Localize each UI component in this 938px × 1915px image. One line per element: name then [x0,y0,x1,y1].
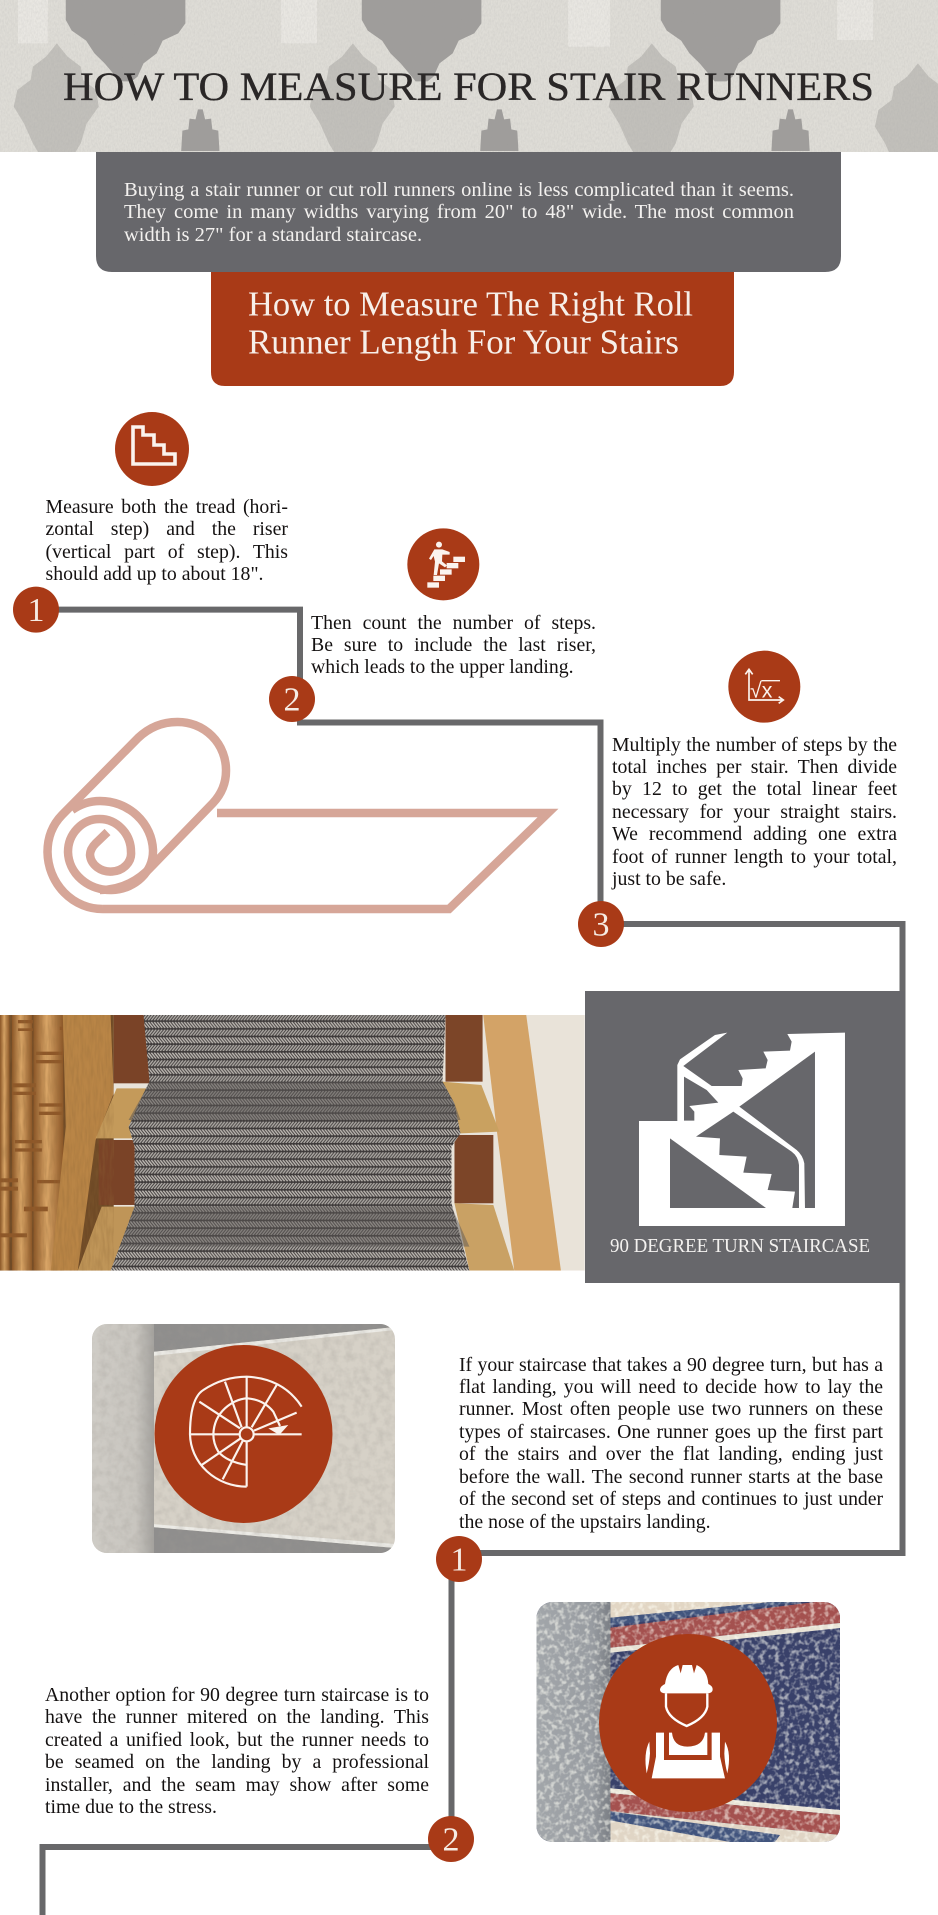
photo: herringbone stair runner [0,1015,585,1271]
option 2 text: have the runner mitered on the landing. This [45,1706,429,1728]
step 3 text [611,734,897,890]
badge: step 1: 1 [28,592,44,629]
option 1 text: before the wall. The second runner starts at the base [459,1466,883,1488]
intro text: width is 27" for a standard staircase. [124,224,422,246]
step 3 text: necessary for your straight stairs. [612,801,897,823]
step 2 text: Be sure to include the last riser, [311,634,596,656]
icon: square root graph: √x [750,678,773,702]
badge: step 2 [269,676,315,722]
step 2 text [311,612,596,678]
header banner [0,0,938,152]
option 1 text: the nose of the upstairs landing. [459,1511,711,1533]
icon: stair outline [115,412,189,486]
panel label: 90 DEGREE TURN STAIRCASE [610,1235,870,1257]
step 3 text: total inches per stair. Then divide [612,756,897,778]
connector lines [36,610,902,1915]
step 3 text: We recommend adding one extra [612,823,897,845]
icon: square root graph [728,651,800,723]
icon: turning staircase [639,1033,845,1226]
step 3 text: Multiply the number of steps by the [612,734,897,756]
step 3 text: just to be safe. [612,868,726,890]
badge: option 1 [436,1536,482,1582]
step 1 text [46,496,288,585]
step 1 text: Measure both the tread (hori- [46,496,288,518]
panel: subheading [211,272,734,386]
panel: intro [96,152,841,272]
badge: option 2: 2 [442,1822,460,1858]
option 2 text [45,1684,429,1818]
icon: installer [645,1665,729,1778]
option 1 text: If your staircase that takes a 90 degree turn, but has a [459,1354,883,1376]
intro text: Buying a stair runner or cut roll runners online is less complicated than it seems. [124,179,794,201]
step 1 text: (vertical part of step). This [46,541,288,563]
intro text [124,179,794,246]
option 2 text: Another option for 90 degree turn staircase is to [45,1684,429,1706]
option 1 text: flat landing, you will need to decide how to lay the [459,1376,883,1398]
option 1 text: types of staircases. One runner goes up the first part [459,1421,883,1443]
badge: step 3 [578,901,624,947]
badge: option 2 [428,1816,474,1862]
step 3 text: foot of runner length to your total, [612,846,897,868]
icon: person climbing stairs [407,528,479,600]
option 2 text: time due to the stress. [45,1796,217,1818]
step 3 text: by 12 to get the total linear feet [612,778,897,800]
badge: step 3: 3 [592,906,610,944]
step 2 text: Then count the number of steps. [311,612,596,634]
photo: navy rolled rug with installer icon [536,1602,840,1842]
option 1 text: runner. Most often people use two runners on these [459,1398,883,1420]
badge: step 1 [13,587,59,633]
badge: option 1: 1 [450,1542,468,1578]
badge: step 2: 2 [284,682,300,718]
step 1 text: zontal step) and the riser [46,518,288,540]
step 2 text: which leads to the upper landing. [311,656,574,678]
panel: 90 degree turn staircase [585,991,905,1283]
photo: beige rolled rug with spiral stair icon [92,1324,395,1553]
option 2 text: installer, and the seam may show after some [45,1774,429,1796]
icon: spiral staircase plan [190,1377,302,1487]
icon: rolled runner [48,722,548,909]
option 1 text: of the second set of steps and continues to just under [459,1488,883,1510]
option 2 text: created a unified look, but the runner needs to [45,1729,429,1751]
heading line 2: Runner Length For Your Stairs [248,322,679,362]
heading line 1: How to Measure The Right Roll [248,284,693,324]
option 1 text [459,1354,883,1533]
step 1 text: should add up to about 18". [46,563,263,585]
option 2 text: be seamed on the landing by a professional [45,1751,429,1773]
title: HOW TO MEASURE FOR STAIR RUNNERS [63,64,874,109]
option 1 text: of the stairs and over the flat landing, ending just [459,1443,883,1465]
intro text: They come in many widths varying from 20" to 48" wide. The most common [124,201,794,223]
